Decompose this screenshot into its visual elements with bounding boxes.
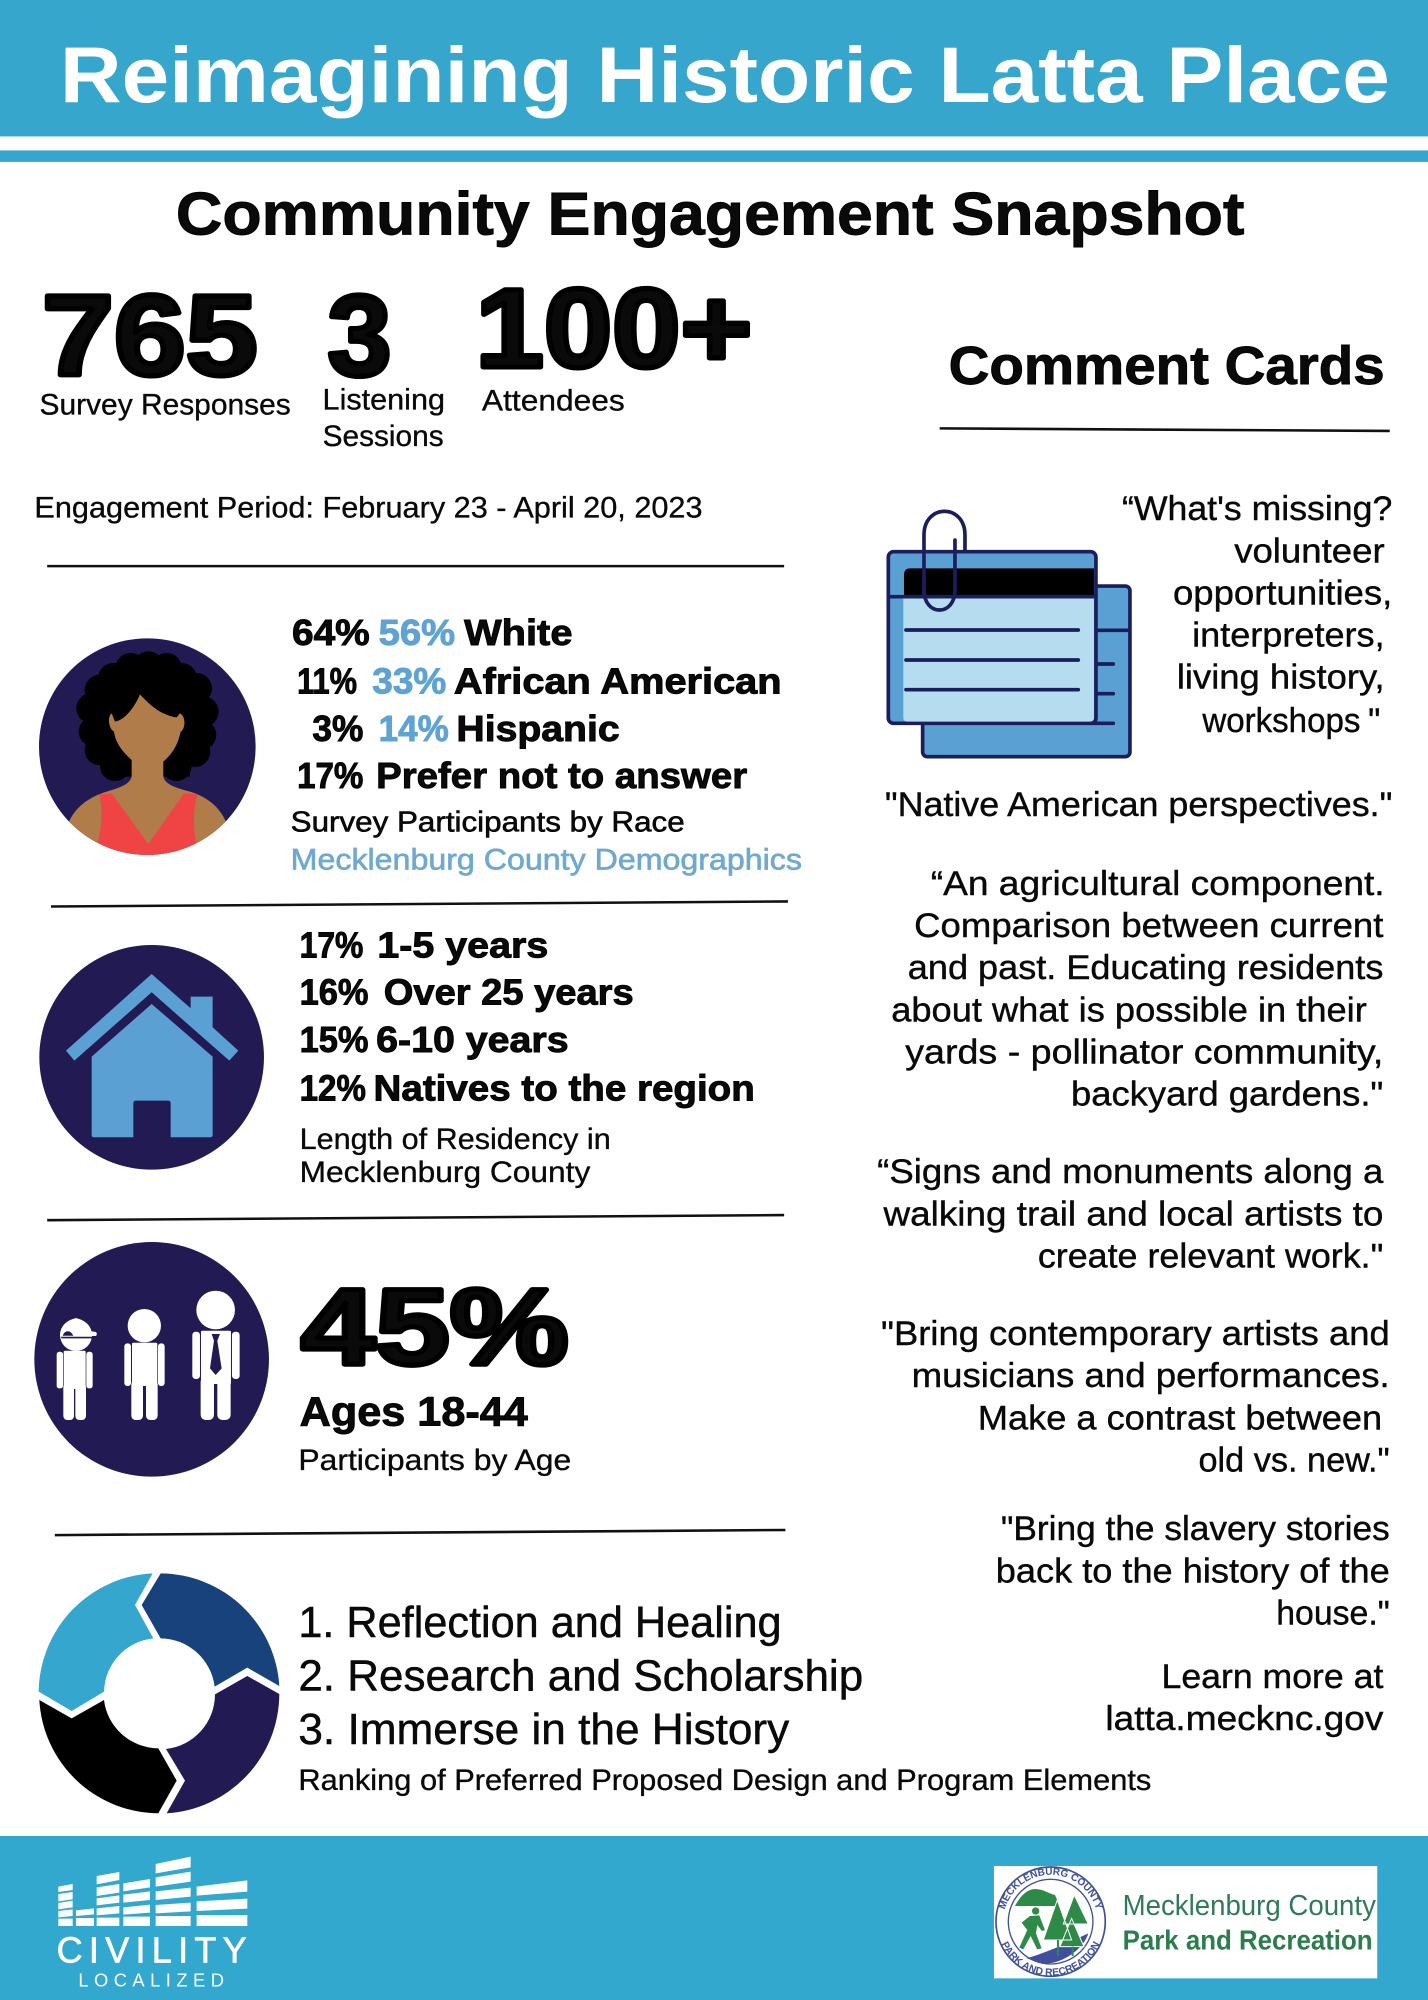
panel: rankings bbox=[39, 1573, 1151, 1813]
residency caption bbox=[300, 1123, 611, 1189]
race percentages: African American bbox=[454, 662, 782, 702]
panel: residency bbox=[39, 926, 755, 1189]
comment: what's missing: living history, bbox=[1177, 658, 1385, 696]
stat: survey responses bbox=[40, 272, 291, 421]
stat: listening sessions: Sessions bbox=[323, 420, 444, 453]
comment: agricultural: and past. Educating residents bbox=[908, 949, 1383, 987]
comment: slavery stories bbox=[996, 1510, 1390, 1632]
residency figures: 1-5 years bbox=[377, 926, 548, 966]
comment: signs and monuments: walking trail and local artists to bbox=[883, 1195, 1383, 1233]
comment: what's missing: " bbox=[1368, 702, 1380, 740]
race percentages: 56% bbox=[379, 613, 455, 653]
comment: signs and monuments bbox=[877, 1153, 1384, 1275]
comment: contemporary artists: Make a contrast between bbox=[978, 1399, 1382, 1437]
comment cards heading: Comment Cards bbox=[949, 337, 1385, 396]
icon: three age figures bbox=[34, 1242, 269, 1477]
icon: house bbox=[39, 945, 264, 1170]
residency figures bbox=[300, 926, 755, 1108]
ranked list bbox=[298, 1599, 863, 1754]
title: Reimagining Historic Latta Place bbox=[60, 30, 1390, 119]
logo: mecklenburg county park and recreation bbox=[994, 1866, 1378, 1978]
comment: what's missing: volunteer bbox=[1234, 532, 1385, 570]
residency figures: Natives to the region bbox=[374, 1068, 755, 1108]
engagement period: Engagement Period: February 23 - April 20, 2023 bbox=[34, 492, 703, 525]
icon: woman portrait bbox=[39, 638, 256, 867]
park department name: Mecklenburg County bbox=[1123, 1890, 1377, 1922]
residency figures: 16% bbox=[300, 973, 368, 1013]
stat: attendees: 100+ bbox=[476, 265, 752, 391]
race percentages: Prefer not to answer bbox=[376, 756, 747, 796]
age caption: Participants by Age bbox=[298, 1444, 571, 1477]
stat: listening sessions bbox=[323, 272, 445, 453]
panel: race bbox=[39, 613, 802, 877]
comment: what's missing: interpreters, bbox=[1192, 616, 1385, 654]
comment: what's missing: workshops bbox=[1201, 702, 1360, 740]
comment: what's missing: opportunities, bbox=[1173, 574, 1392, 612]
stat: listening sessions: 3 bbox=[328, 272, 391, 400]
localized wordmark: LOCALIZED bbox=[78, 1970, 224, 1991]
comment: agricultural: backyard gardens." bbox=[1071, 1075, 1383, 1113]
footer band bbox=[0, 1836, 1428, 2000]
icon: index cards with paperclip bbox=[888, 511, 1130, 757]
ranked list: 2. Research and Scholarship bbox=[298, 1653, 863, 1701]
comment: contemporary artists: old vs. new." bbox=[1199, 1441, 1390, 1479]
logo: mecklenburg county park and recreation: Park and Recreation bbox=[1123, 1924, 1373, 1955]
header banner bbox=[0, 0, 1428, 162]
comment: agricultural: about what is possible in their bbox=[891, 991, 1367, 1029]
logo: civility localized bbox=[57, 1857, 247, 1991]
ranking caption: Ranking of Preferred Proposed Design and Program Elements bbox=[298, 1764, 1151, 1797]
comment: contemporary artists: "Bring contemporary artists and bbox=[881, 1315, 1390, 1353]
residency caption: Mecklenburg County bbox=[300, 1156, 591, 1189]
stat: attendees: Attendees bbox=[482, 385, 625, 418]
panel: age bbox=[34, 1242, 571, 1477]
comment: contemporary artists bbox=[881, 1315, 1390, 1479]
residency figures: 15% bbox=[300, 1020, 368, 1060]
subtitle: Community Engagement Snapshot bbox=[176, 181, 1244, 248]
race percentages: 3% bbox=[312, 709, 363, 749]
learn more: latta.mecknc.gov bbox=[1105, 1700, 1384, 1738]
comment: contemporary artists: musicians and performances. bbox=[912, 1357, 1390, 1395]
age statistic: 45% bbox=[301, 1266, 569, 1387]
comment: slavery stories: house." bbox=[1276, 1594, 1390, 1632]
race percentages: 11% bbox=[297, 662, 357, 702]
residency figures: 12% bbox=[300, 1068, 366, 1108]
race percentages: 64% bbox=[292, 613, 370, 653]
learn more: Learn more at bbox=[1162, 1658, 1384, 1696]
comment: signs and monuments: “Signs and monuments along a bbox=[877, 1153, 1384, 1191]
residency caption: Length of Residency in bbox=[300, 1123, 611, 1156]
seal lettering: MECKLENBURG COUNTY bbox=[998, 1868, 1102, 1910]
stat: survey responses: Survey Responses bbox=[40, 388, 291, 421]
comment: slavery stories: "Bring the slavery stories bbox=[1001, 1510, 1390, 1548]
logo: mecklenburg county park and recreation: PARK AND RECREATION bbox=[1002, 1941, 1100, 1976]
race caption: Survey Participants by Race bbox=[291, 806, 685, 838]
comment: agricultural: “An agricultural component. bbox=[931, 865, 1385, 903]
age label: Ages 18-44 bbox=[300, 1388, 528, 1434]
comment: what's missing bbox=[1122, 490, 1392, 740]
comment: agricultural: yards - pollinator community, bbox=[905, 1033, 1383, 1071]
comment: agricultural bbox=[891, 865, 1385, 1113]
learn more bbox=[1105, 1658, 1384, 1738]
stat: survey responses: 765 bbox=[42, 272, 258, 400]
race percentages bbox=[292, 613, 782, 796]
icon: cycle donut bbox=[39, 1573, 279, 1813]
race percentages: 17% bbox=[297, 756, 363, 796]
stat: listening sessions: Listening bbox=[323, 383, 445, 416]
ranked list: 1. Reflection and Healing bbox=[298, 1599, 782, 1647]
race percentages: Hispanic bbox=[456, 709, 620, 749]
race caption bbox=[291, 806, 802, 877]
comment: signs and monuments: create relevant work." bbox=[1038, 1237, 1383, 1275]
race percentages: White bbox=[464, 613, 572, 653]
race percentages: 14% bbox=[379, 709, 449, 749]
race percentages: 33% bbox=[372, 662, 446, 702]
race caption: Mecklenburg County Demographics bbox=[291, 844, 802, 877]
ranked list: 3. Immerse in the History bbox=[298, 1706, 790, 1754]
comment: native american: "Native American perspectives." bbox=[885, 786, 1392, 824]
residency figures: Over 25 years bbox=[384, 973, 634, 1013]
comment: agricultural: Comparison between current bbox=[914, 907, 1384, 945]
comment: slavery stories: back to the history of the bbox=[996, 1552, 1390, 1590]
residency figures: 6-10 years bbox=[376, 1020, 569, 1060]
panel: comment cards bbox=[877, 337, 1392, 1738]
residency figures: 17% bbox=[300, 926, 363, 966]
civility wordmark: CIVILITY bbox=[57, 1930, 247, 1971]
comment: what's missing: “What's missing? bbox=[1122, 490, 1392, 528]
